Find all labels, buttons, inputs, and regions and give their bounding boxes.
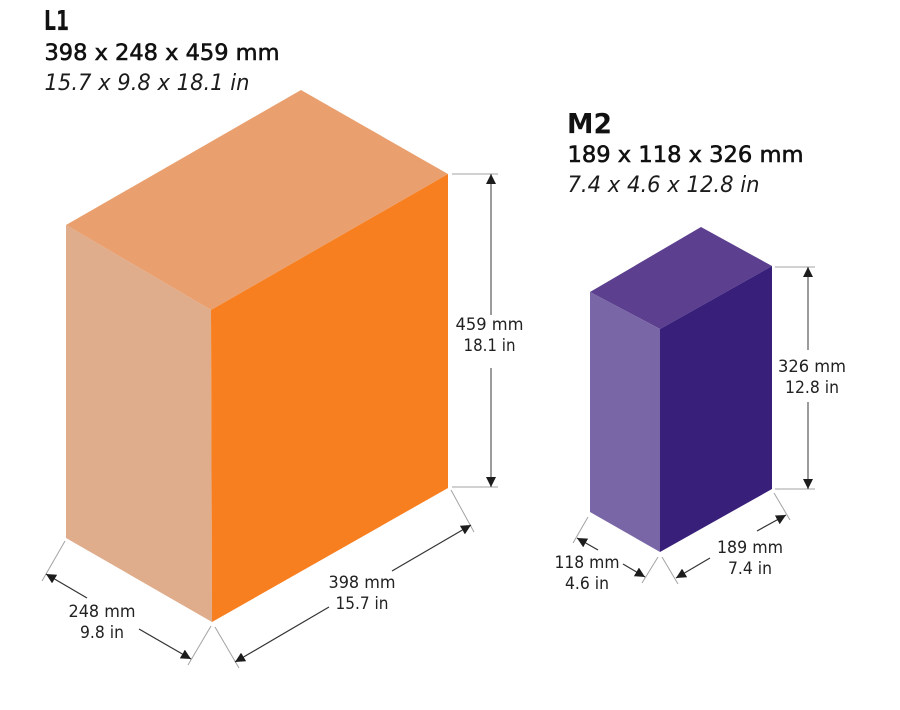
heading: M2 specifications: [567, 107, 804, 198]
dimension: M2 height: 326 mm: [778, 357, 846, 376]
dimension: M2 width: [662, 493, 790, 584]
heading: L1 specifications: L1: [44, 4, 69, 37]
dimension: L1 depth: 9.8 in: [80, 623, 124, 642]
dimension: L1 depth: [42, 541, 211, 665]
dimension: L1 width: [215, 490, 474, 668]
dimension: M2 depth: 4.6 in: [565, 574, 609, 593]
dimension: L1 height: 459 mm: [456, 315, 524, 334]
dimension: L1 width: 15.7 in: [336, 594, 388, 613]
dimension: M2 height: [775, 267, 846, 489]
dimension: M2 width: 7.4 in: [728, 559, 772, 578]
heading: L1 specifications: [44, 4, 280, 96]
dimension: M2 height: 12.8 in: [785, 378, 839, 397]
dimension: L1 height: [452, 174, 524, 487]
dimension: M2 depth: 118 mm: [554, 553, 620, 572]
purple box M2: [590, 227, 772, 552]
heading: M2 specifications: 189 x 118 x 326 mm: [568, 142, 804, 168]
dimension: M2 width: 189 mm: [717, 538, 783, 557]
heading: M2 specifications: M2: [567, 107, 612, 140]
dimension: L1 width: 398 mm: [328, 573, 396, 592]
dimension: L1 height: 18.1 in: [464, 336, 516, 355]
dimension: M2 depth: [554, 517, 658, 593]
heading: L1 specifications: 15.7 x 9.8 x 18.1 in: [44, 70, 250, 96]
heading: M2 specifications: 7.4 x 4.6 x 12.8 in: [568, 172, 760, 198]
heading: L1 specifications: 398 x 248 x 459 mm: [44, 40, 280, 66]
dimension: L1 depth: 248 mm: [68, 602, 136, 621]
orange box L1: [66, 90, 448, 622]
